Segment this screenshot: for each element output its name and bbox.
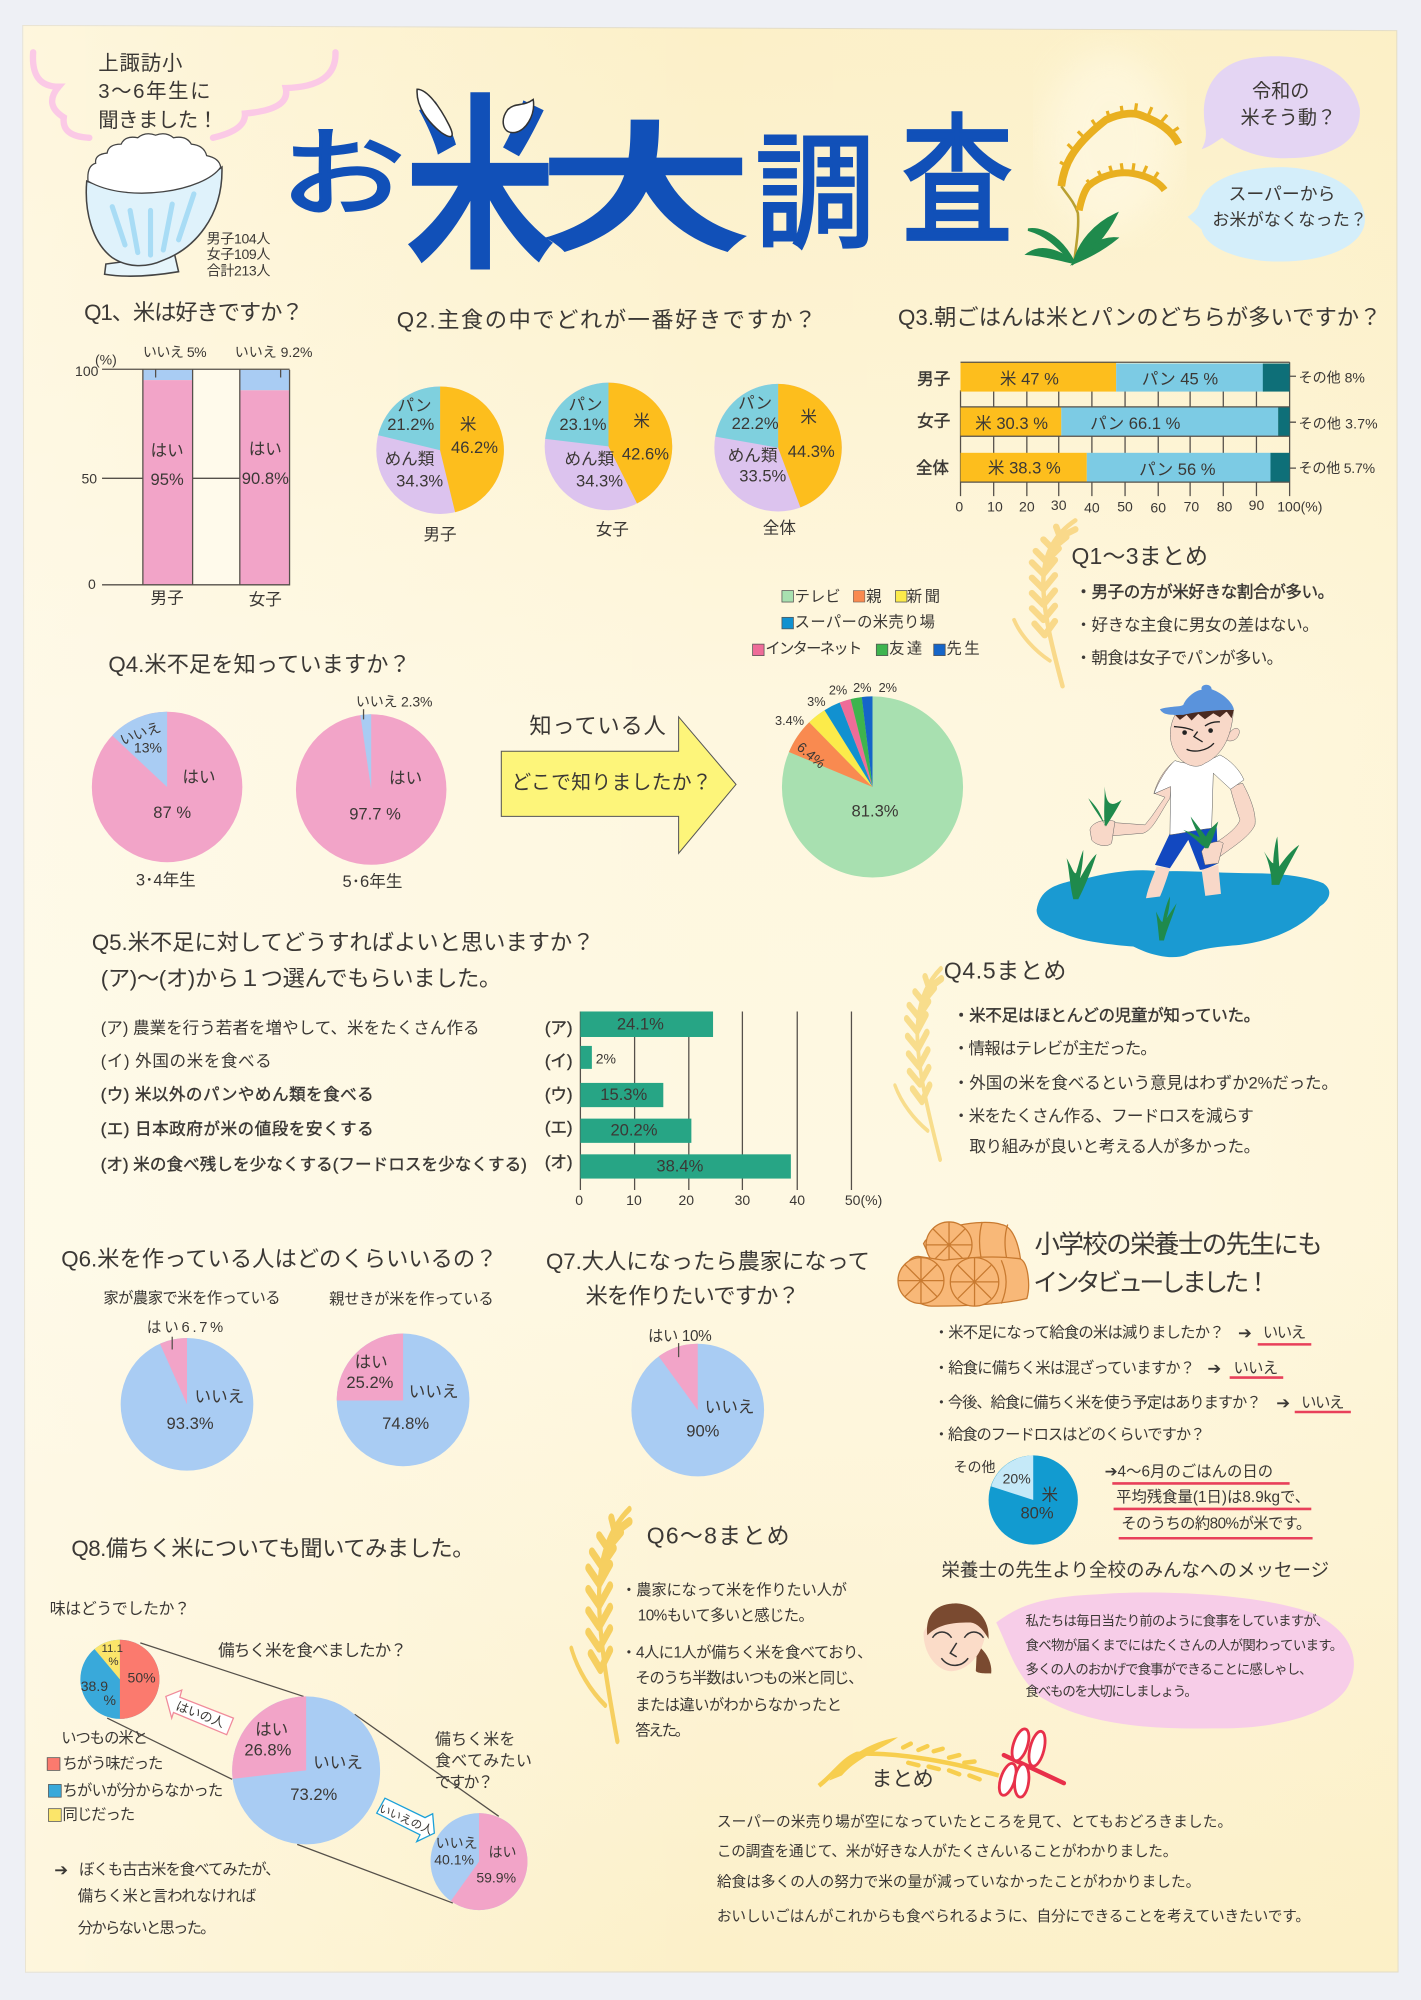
chart: Q1 stacked bars: 100 (75, 363, 99, 379)
summary: Q6-8: そのうち半数はいつもの米と同じ、 (635, 1670, 864, 1687)
chart: Q3 breakfast bars: 40 (1084, 500, 1100, 516)
summary: Q6-8: 答えた。 (635, 1722, 690, 1739)
chart: Q6 farm family pie: はい6.7% (147, 1320, 223, 1336)
heading: nutritionist message: 栄養士の先生より全校のみんなへのメッセージ (941, 1560, 1329, 1581)
summary: Q1-3: ・好きな主食に男女の差はない。 (1075, 616, 1319, 634)
title (279, 83, 1013, 293)
heading: nutritionist interview (1033, 1231, 1323, 1297)
chart: Q2 pie girls: パン (568, 395, 602, 414)
chart: Q2 pie boys: パン (398, 396, 432, 415)
text: Q8 comment: ぼくも古古米を食べてみたが、 (79, 1861, 281, 1878)
title: 調 (755, 124, 875, 264)
arrow: where did you learn (501, 713, 736, 853)
text: Q8 comment: ➔ (54, 1860, 68, 1879)
chart: Q3 breakfast bars: パン 56 % (1139, 460, 1216, 479)
chart: Q3 breakfast bars: 80 (1217, 498, 1233, 514)
legend: taste: いつもの米と (61, 1730, 148, 1747)
icon: red dragonfly (996, 1727, 1064, 1798)
heading: Q1: Q1、米は好きですか？ (84, 300, 304, 325)
chart: Q1 stacked bars: 95% (151, 470, 184, 489)
summary: Q4-5: ・米不足はほとんどの児童が知っていた。 (953, 1006, 1260, 1025)
chart: Q4 information sources pie: 2% (829, 683, 847, 698)
heading: Q7 (546, 1249, 870, 1308)
chart: Q8 connected pies: 備ちく米を (435, 1730, 515, 1748)
chart: Q5 horizontal bars: 30 (735, 1192, 750, 1208)
legend: information sources: 親 (866, 588, 881, 605)
chart: Q3 breakfast bars: 米 47 % (1000, 369, 1059, 388)
chart: Q1 stacked bars: 90.8% (242, 469, 289, 488)
chart: Q8 connected pies: 40.1% (434, 1852, 474, 1868)
list: interview questions: いいえ (1301, 1395, 1344, 1412)
chart: Q6 farm family pie: 93.3% (167, 1414, 214, 1433)
chart: Q3 breakfast bars: 0 (955, 498, 963, 514)
chart: Q4 pie grade 5-6: 5･6年生 (343, 872, 402, 891)
chart: Q3 breakfast bars: その他 8% (1299, 370, 1365, 386)
callout: reiwa rice panic (1202, 56, 1360, 158)
chart: Q3 breakfast bars: 20 (1019, 498, 1035, 514)
chart: Q3 breakfast bars (916, 362, 1378, 516)
chart: Q8 connected pies: 26.8% (244, 1741, 292, 1759)
title: 米 (404, 83, 556, 293)
heading: Q8: Q8.備ちく米についても聞いてみました。 (71, 1536, 475, 1561)
callout: nutritionist message (996, 1593, 1354, 1728)
chart: Q6 relatives pie (329, 1291, 494, 1466)
summary: Q1-3: ・男子の方が米好きな割合が多い。 (1075, 582, 1334, 601)
chart: Q8 connected pies: 59.9% (476, 1870, 516, 1886)
icon: rice bowl: 女子109人 (207, 246, 270, 262)
chart: Q5 horizontal bars: 2% (596, 1051, 616, 1067)
chart: Q8 connected pies: はい (489, 1844, 517, 1860)
legend: information sources: 友達 (889, 641, 922, 658)
chart: Q6 farm family pie (103, 1290, 281, 1471)
chart: Q4 pie grade 3-4: 3･4年生 (136, 871, 196, 890)
chart: Q8 connected pies: 食べてみたい (435, 1752, 532, 1770)
chart: Q3 breakfast bars: 全体 (916, 459, 949, 478)
summary: overall: スーパーの米売り場が空になっていたところを見て、とてもおどろきました。 (717, 1814, 1232, 1831)
list: Q5 options: (イ) 外国の米を食べる (101, 1052, 272, 1071)
list: interview questions: いいえ (1233, 1360, 1278, 1377)
list: interview questions: ➔ (1207, 1359, 1221, 1378)
chart: Q3 breakfast bars: その他 5.7% (1299, 460, 1375, 476)
chart: Q2 pie all: 全体 (763, 519, 796, 538)
chart: Q2 pie girls: 23.1% (559, 415, 607, 434)
chart: Q5 horizontal bars: (ア) (545, 1019, 573, 1038)
illustration: boy planting rice (1037, 685, 1329, 957)
callout: no rice in supermarket (1188, 167, 1367, 262)
chart: Q8 connected pies: いいえ (436, 1835, 478, 1851)
legend: taste: ちがいが分からなかった (63, 1782, 223, 1799)
chart: Q2 pie boys: 21.2% (387, 415, 434, 434)
chart: Q2 pie boys: 米 (460, 415, 477, 434)
chart: Q4 pie grade 3-4: いいえ (118, 719, 163, 748)
icon: nutritionist face (924, 1603, 991, 1673)
legend: information sources: 先生 (946, 641, 980, 658)
list: interview questions (934, 1323, 1351, 1443)
chart: Q4 information sources pie: 2% (853, 680, 872, 695)
chart: Q5 horizontal bars: 10 (626, 1192, 642, 1208)
chart: Q1 stacked bars: 女子 (249, 590, 282, 609)
chart: Q3 breakfast bars: 男子 (917, 369, 950, 388)
summary: Q6-8: ・農家になって米を作りたい人が (621, 1582, 847, 1599)
chart: Q3 breakfast bars: 米 38.3 % (988, 459, 1061, 478)
chart: Q3 breakfast bars: その他 3.7% (1299, 415, 1378, 431)
chart: Q3 breakfast bars: 50 (1117, 498, 1133, 514)
chart: food loss pie: 米 (1042, 1485, 1059, 1504)
legend: taste (47, 1730, 223, 1824)
chart: Q5 horizontal bars: 0 (575, 1192, 583, 1208)
summary: Q4-5: ・外国の米を食べるという意見はわずか2%だった。 (953, 1073, 1338, 1092)
arrow: where did you learn: どこで知りましたか？ (512, 772, 712, 794)
text: food loss result: そのうちの約80%が米です。 (1121, 1516, 1311, 1533)
list: Q5 options: (エ) 日本政府が米の値段を安くする (101, 1119, 374, 1138)
chart: Q2 pie girls: 34.3% (576, 471, 623, 490)
chart: Q2 pie boys (376, 386, 504, 544)
chart: Q5 horizontal bars: (オ) (545, 1152, 573, 1171)
chart: Q6 farm family pie: いいえ (195, 1387, 244, 1406)
list: Q5 options (101, 1019, 527, 1174)
list: interview questions: ・給食に備ちく米は混ざっていますか？ (934, 1359, 1195, 1377)
chart: Q3 breakfast bars: 女子 (917, 411, 950, 430)
chart: Q8 connected pies: いいえの人 (377, 1802, 435, 1838)
summary: Q1-3: ・朝食は女子でパンが多い。 (1075, 649, 1283, 668)
chart: Q2 pie all: 33.5% (739, 466, 787, 485)
chart: Q4 pie grade 3-4: はい (182, 767, 216, 786)
chart: Q5 horizontal bars: (イ) (545, 1052, 573, 1071)
icon: rice bowl: 男子104人 (207, 231, 270, 247)
summary: Q6-8: 10%もいて多いと感じた。 (638, 1607, 814, 1625)
chart: Q8 connected pies: ですか？ (435, 1774, 494, 1792)
list: interview questions: いいえ (1263, 1324, 1306, 1341)
callout: nutritionist message: 食べ物が届くまでにはたくさんの人が関わっています。 (1026, 1638, 1343, 1653)
chart: Q4 information sources pie: 6.4% (794, 739, 829, 771)
summary: Q6-8: ・4人に1人が備ちく米を食べており、 (621, 1645, 872, 1662)
callout: nutritionist message: 食べものを大切にしましょう。 (1026, 1684, 1198, 1699)
callout: no rice in supermarket: お米がなくなった？ (1212, 209, 1367, 229)
icon: rice bowl: 合計213人 (207, 262, 270, 278)
chart: Q1 stacked bars: いいえ 5% (143, 344, 207, 360)
summary: overall: 給食は多くの人の努力で米の量が減っていなかったことがわかりました。 (717, 1873, 1200, 1891)
chart: Q4 pie grade 5-6 (296, 694, 446, 891)
chart: Q5 horizontal bars: 15.3% (600, 1085, 648, 1104)
chart: Q2 pie boys: 男子 (423, 525, 457, 544)
heading: Q5 (92, 930, 594, 991)
chart: Q5 horizontal bars: (エ) (545, 1118, 573, 1137)
chart: Q5 horizontal bars: 38.4% (656, 1156, 704, 1175)
chart: Q4 pie grade 3-4 (92, 712, 242, 890)
list: Q5 options: (ウ) 米以外のパンやめん類を食べる (101, 1085, 374, 1104)
legend: taste: 同じだった (63, 1807, 135, 1824)
chart: Q5 horizontal bars: 50(%) (845, 1192, 882, 1208)
chart: Q1 stacked bars: 男子 (151, 589, 184, 608)
chart: Q3 breakfast bars: 70 (1184, 498, 1199, 514)
heading: nutritionist interview: インタビューしました！ (1033, 1269, 1270, 1297)
chart: Q2 pie boys: 46.2% (451, 438, 498, 457)
chart: Q7 pie (631, 1328, 764, 1476)
chart: Q1 stacked bars (75, 344, 313, 609)
chart: Q8 connected pies: 50% (128, 1669, 156, 1685)
chart: Q4 pie grade 5-6: はい (389, 769, 422, 788)
text: food loss result: ➔4～6月のごはんの日の (1105, 1463, 1273, 1480)
list: Q5 options: (オ) 米の食べ残しを少なくする(フードロスを少なくする) (101, 1155, 527, 1174)
heading: Q6: Q6.米を作っている人はどのくらいいるの？ (61, 1246, 497, 1271)
text: food loss result: 平均残食量(1日)は8.9kgで、 (1116, 1489, 1310, 1506)
text: food loss result (1105, 1463, 1313, 1538)
text: Q8 comment: 分からないと思った。 (78, 1920, 216, 1937)
chart: Q8 connected pies: いいえ (313, 1753, 363, 1772)
header: survey note cloud: 3～6年生に (98, 80, 210, 103)
legend: information sources (753, 588, 980, 658)
title: 大 (537, 111, 754, 270)
chart: Q4 pie grade 3-4: 87 % (153, 803, 191, 822)
text: Q8 comment (54, 1860, 281, 1937)
heading: nutritionist interview: 小学校の栄養士の先生にも (1034, 1231, 1323, 1259)
chart: Q7 pie: いいえ (705, 1397, 755, 1416)
chart: Q6 relatives pie: いいえ (409, 1382, 459, 1401)
chart: Q2 pie all: 米 (800, 408, 817, 427)
list: interview questions: ・米不足になって給食の米は減りましたか？ (934, 1324, 1225, 1341)
list: Q5 options: (ア) 農業を行う若者を増やして、米をたくさん作る (101, 1019, 480, 1038)
chart: food loss pie: 20% (1003, 1470, 1031, 1486)
chart: Q3 breakfast bars: 米 30.3 % (975, 414, 1048, 433)
icon: rice bowl (86, 134, 270, 278)
chart: Q6 relatives pie: 親せきが米を作っている (329, 1291, 494, 1308)
chart: Q2 pie all: 44.3% (788, 442, 835, 461)
chart: Q2 pie all (714, 384, 842, 538)
header: survey note cloud: 聞きました！ (98, 110, 218, 132)
chart: Q1 stacked bars: いいえ 9.2% (235, 344, 313, 360)
chart: Q8 connected pies: 73.2% (290, 1785, 338, 1804)
summary: overall (717, 1737, 1310, 1925)
chart: Q6 relatives pie: 74.8% (382, 1414, 429, 1433)
chart: Q7 pie: 90% (686, 1422, 720, 1441)
chart: Q2 pie girls: めん類 (564, 450, 615, 469)
callout: no rice in supermarket: スーパーから (1229, 184, 1335, 204)
chart: Q3 breakfast bars: 60 (1150, 500, 1166, 516)
chart: Q5 horizontal bars: 20 (678, 1192, 694, 1208)
chart: Q1 stacked bars: はい (151, 441, 184, 460)
chart: Q6 farm family pie: 家が農家で米を作っている (103, 1290, 281, 1307)
chart: Q2 pie girls: 42.6% (622, 445, 669, 464)
callout: nutritionist message: 多くの人のおかげで食事ができることに感しゃし、 (1026, 1661, 1313, 1677)
chart: Q5 horizontal bars: 40 (789, 1192, 805, 1208)
legend: information sources: テレビ (795, 588, 841, 605)
chart: Q5 horizontal bars (545, 1011, 882, 1208)
legend: information sources: インターネット (765, 641, 862, 658)
summary: Q6-8: または違いがわからなかったと (635, 1697, 842, 1714)
chart: Q8 connected pies: はいの人 (174, 1698, 227, 1731)
chart: Q8 connected pies: 38.9 (81, 1678, 108, 1694)
summary: overall: おいしいごはんがこれからも食べられるように、自分にできることを考えていきたいです。 (717, 1908, 1310, 1925)
chart: Q2 pie girls (545, 383, 672, 539)
chart: Q6 relatives pie: 25.2% (346, 1373, 394, 1392)
chart: Q5 horizontal bars: 24.1% (617, 1015, 664, 1034)
chart: Q3 breakfast bars: 30 (1051, 497, 1067, 513)
summary: Q6-8: Q6～8まとめ (647, 1523, 790, 1549)
chart: Q8 connected pies: 味はどうでしたか？ (50, 1600, 190, 1618)
chart: food loss pie (954, 1455, 1078, 1545)
callout: nutritionist message: 私たちは毎日当たり前のように食事をしていますが、 (1026, 1613, 1329, 1629)
chart: Q2 pie all: パン (738, 394, 772, 413)
chart: Q3 breakfast bars: パン 45 % (1142, 369, 1218, 388)
chart: Q5 horizontal bars: 20.2% (610, 1121, 658, 1140)
list: interview questions: ➔ (1276, 1394, 1290, 1413)
summary: overall: まとめ (871, 1768, 934, 1791)
heading: Q5: Q5.米不足に対してどうすればよいと思いますか？ (92, 930, 594, 955)
chart: food loss pie: 80% (1020, 1503, 1054, 1522)
chart: Q2 pie girls: 女子 (596, 520, 629, 539)
summary: Q4-5 (889, 958, 1338, 1162)
chart: Q8 connected pies: はい (255, 1720, 288, 1739)
arrow: where did you learn: 知っている人 (529, 713, 666, 738)
summary: Q1-3 (1014, 520, 1334, 686)
chart: Q1 stacked bars: (%) (95, 352, 117, 368)
list: interview questions: ➔ (1238, 1323, 1252, 1342)
heading: Q5: (ア)～(オ)から１つ選んでもらいました。 (101, 966, 501, 991)
header: survey note cloud: 上諏訪小 (98, 52, 182, 75)
chart: Q4 pie grade 5-6: いいえ 2.3% (356, 694, 432, 710)
chart: Q4 information sources pie: 81.3% (852, 802, 899, 821)
summary: Q4-5: ・米をたくさん作る、フードロスを減らす (953, 1107, 1254, 1126)
heading: Q2: Q2.主食の中でどれが一番好きですか？ (397, 308, 816, 333)
callout: reiwa rice panic: 令和の (1252, 80, 1309, 102)
chart: Q2 pie boys: めん類 (385, 450, 435, 469)
list: interview questions: ・今後、給食に備ちく米を使う予定はありますか？ (934, 1395, 1262, 1412)
chart: Q4 information sources pie: 2% (879, 680, 897, 695)
chart: Q2 pie boys: 34.3% (396, 471, 443, 490)
heading: Q7: Q7.大人になったら農家になって (546, 1249, 870, 1274)
chart: Q8 connected pies: % (103, 1692, 116, 1708)
legend: information sources: 新聞 (907, 588, 940, 605)
summary: Q4-5: Q4.5まとめ (944, 958, 1066, 984)
chart: Q2 pie all: めん類 (728, 446, 778, 465)
chart: Q7 pie: はい 10% (648, 1328, 712, 1345)
chart: Q2 pie girls: 米 (633, 411, 650, 430)
title: お (279, 120, 406, 229)
chart: Q8 connected pies (50, 1600, 532, 1910)
chart: Q4 information sources pie (775, 680, 963, 878)
title: 査 (902, 103, 1013, 261)
chart: Q3 breakfast bars: 100(%) (1277, 498, 1322, 514)
chart: Q3 breakfast bars: 10 (987, 498, 1003, 514)
legend: information sources: スーパーの米売り場 (795, 614, 935, 631)
heading: Q4: Q4.米不足を知っていますか？ (108, 652, 411, 677)
heading: Q3: Q3.朝ごはんは米とパンのどちらが多いですか？ (898, 305, 1381, 330)
header: survey note cloud (33, 52, 336, 138)
summary: Q4-5: 取り組みが良いと考える人が多かった。 (969, 1137, 1260, 1156)
chart: Q8 connected pies: 11.1 (102, 1643, 123, 1655)
list: interview questions: ・給食のフードロスはどのくらいですか？ (934, 1426, 1205, 1443)
heading: Q7: 米を作りたいですか？ (585, 1283, 800, 1308)
chart: Q4 information sources pie: 3.4% (775, 713, 804, 728)
chart: Q5 horizontal bars: (ウ) (545, 1085, 573, 1104)
chart: Q3 breakfast bars: 90 (1249, 497, 1264, 513)
chart: Q4 pie grade 3-4: 13% (134, 739, 162, 755)
icon: rice bales (898, 1222, 1029, 1306)
callout: reiwa rice panic: 米そう動？ (1241, 107, 1336, 129)
chart: Q1 stacked bars: はい (249, 439, 282, 458)
chart: Q8 connected pies: 備ちく米を食べましたか？ (218, 1641, 407, 1660)
chart: Q4 pie grade 5-6: 97.7 % (349, 804, 401, 823)
chart: food loss pie: その他 (954, 1459, 996, 1475)
summary: Q1-3: Q1～3まとめ (1071, 543, 1208, 569)
chart: Q6 relatives pie: はい (355, 1353, 388, 1372)
chart: Q8 connected pies: % (108, 1656, 119, 1668)
chart: Q3 breakfast bars: パン 66.1 % (1090, 414, 1181, 433)
chart: Q2 pie all: 22.2% (732, 414, 779, 433)
chart: Q1 stacked bars: 0 (88, 576, 96, 592)
summary: overall: この調査を通じて、米が好きな人がたくさんいることがわかりました。 (717, 1843, 1177, 1860)
legend: taste: ちがう味だった (63, 1756, 163, 1773)
summary: Q4-5: ・情報はテレビが主だった。 (953, 1039, 1157, 1058)
chart: Q1 stacked bars: 50 (81, 470, 97, 486)
chart: Q4 information sources pie: 3% (807, 694, 826, 709)
summary: Q6-8 (571, 1509, 872, 1741)
icon: rice plant (1028, 103, 1179, 263)
text: Q8 comment: 備ちく米と言われなければ (78, 1888, 256, 1905)
